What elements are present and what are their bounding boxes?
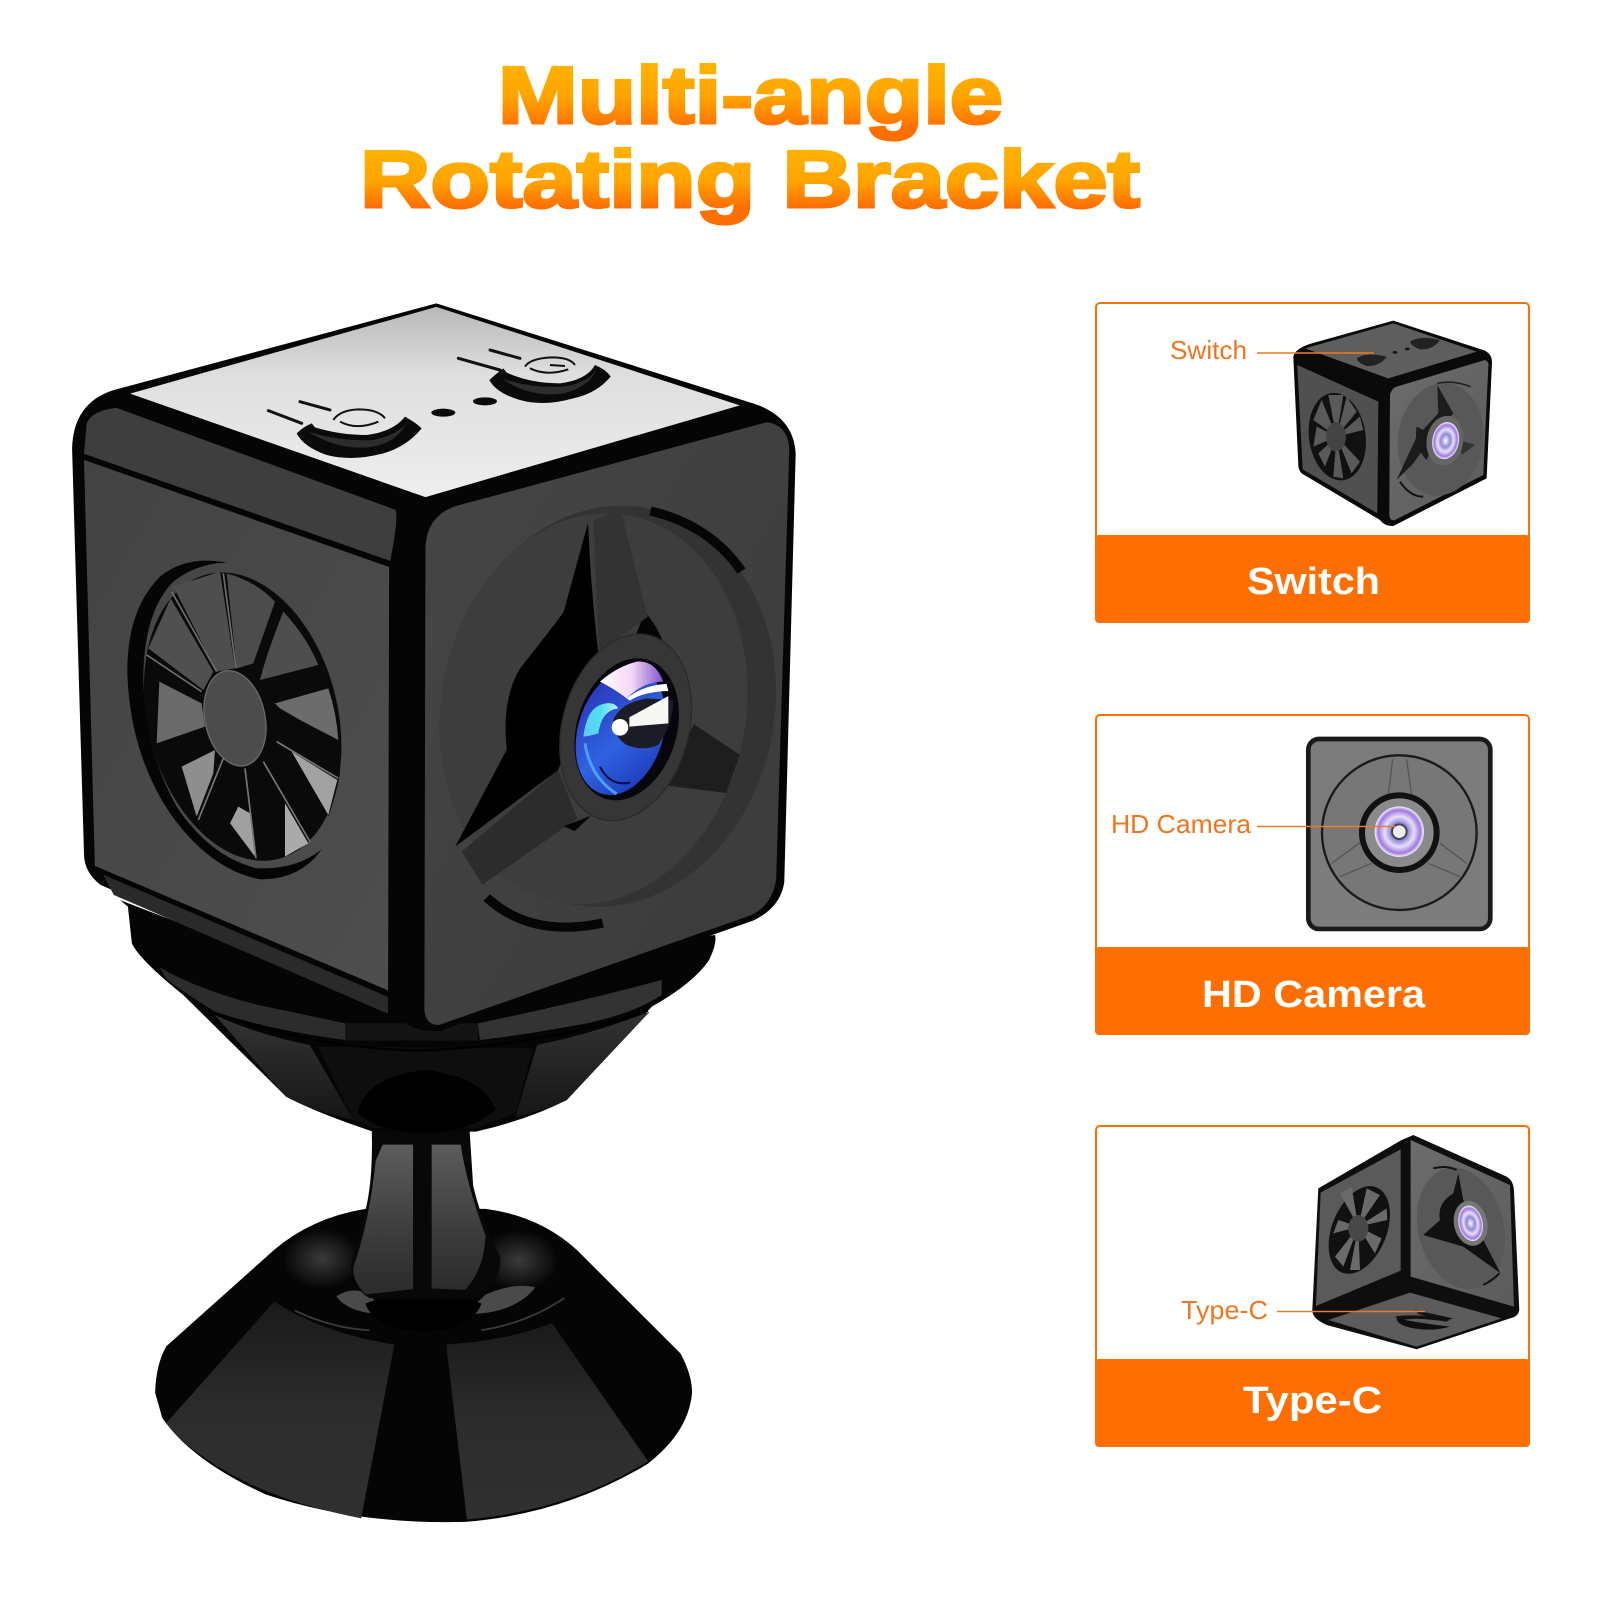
cube body [72,303,796,1031]
title: Rotating Bracket [360,135,1140,225]
label bar text: switch: Switch [1247,561,1380,603]
title: Multi-angle [498,51,1003,141]
vent fan [115,551,370,882]
stand: neck and base [155,1121,692,1522]
left face [84,408,396,1014]
callout: HD camera: HD Camera [1111,809,1252,839]
flange and upper cone [120,900,715,1133]
right face [424,422,789,1025]
top face [130,307,740,497]
small cube: top view [1293,321,1492,526]
label bar text: HD camera: HD Camera [1202,974,1426,1016]
callout: type-C: Type-C [1181,1295,1268,1325]
callout: switch: Switch [1170,335,1247,365]
panel: switch [1095,303,1530,623]
main camera on stand [72,303,803,1522]
panel: type-C [1095,1126,1530,1447]
small cube: front view [1308,739,1490,929]
title [360,51,1140,225]
lens housing: ring, star, arcs [413,485,803,927]
camera cube [72,303,803,1031]
label bar text: type-C: Type-C [1243,1380,1382,1422]
small cube: underside view [1312,1135,1519,1349]
switch buttons and dots [268,350,611,458]
lens [540,619,711,835]
panel: HD camera [1095,715,1530,1035]
